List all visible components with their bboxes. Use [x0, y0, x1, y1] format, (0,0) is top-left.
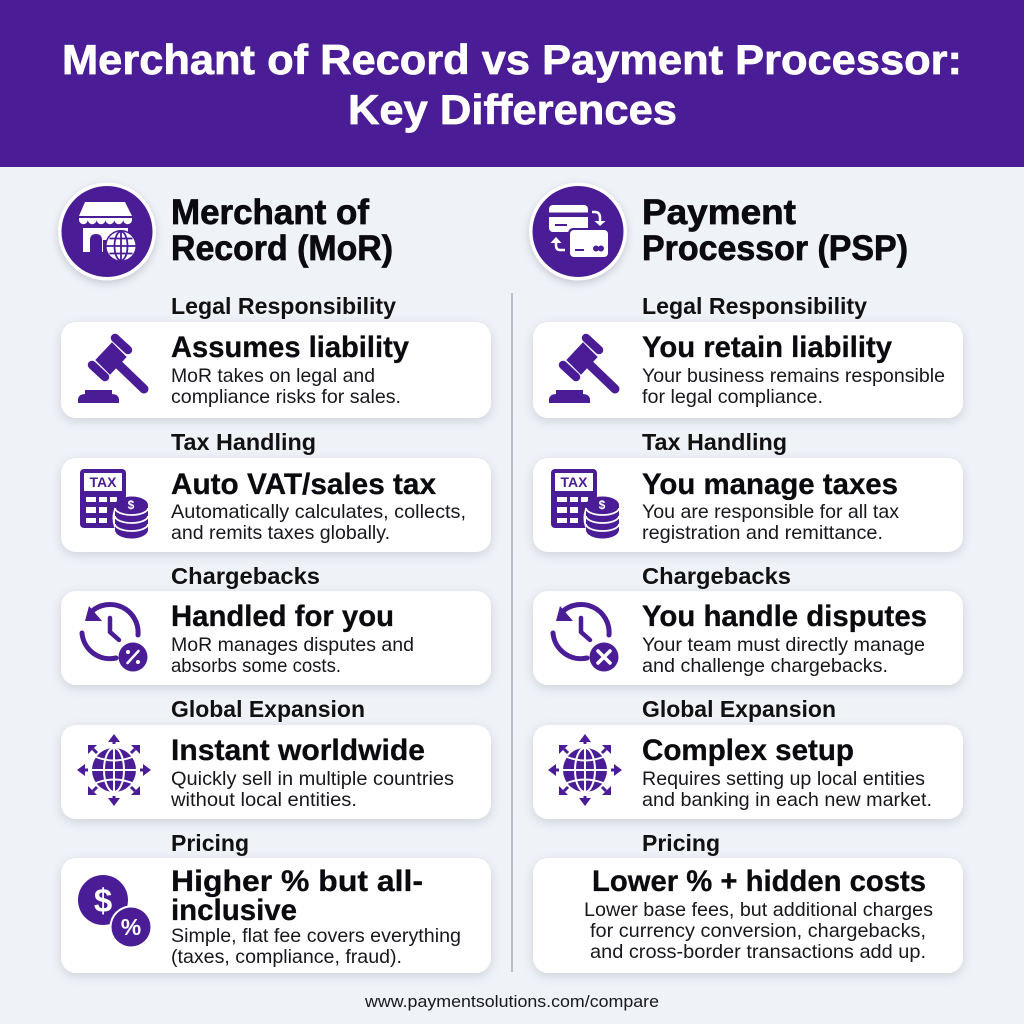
- description: (taxes, compliance, fraud).: [171, 946, 402, 968]
- description: Quickly sell in multiple countries: [171, 768, 454, 790]
- icon: dollar and percent coins: [78, 875, 152, 948]
- card: PSP pricing: [533, 858, 963, 973]
- footer url: www.paymentsolutions.com/compare: [364, 992, 659, 1011]
- column header: Merchant of Record: [58, 182, 393, 280]
- icon: tax calculator and coins: [551, 469, 620, 540]
- heading: You retain liability: [642, 331, 892, 364]
- row label: Global Expansion (PSP): Global Expansion: [642, 696, 836, 722]
- card: MoR legal: [61, 322, 491, 418]
- card: MoR global: [61, 725, 491, 819]
- title: [62, 36, 962, 133]
- heading: Lower % + hidden costs: [592, 865, 926, 898]
- description: and banking in each new market.: [642, 789, 932, 811]
- row label: Pricing (PSP): Pricing: [642, 830, 720, 856]
- heading: Complex setup: [642, 734, 854, 767]
- card: MoR chargebacks: [61, 591, 491, 685]
- row label: Legal Responsibility (MoR): Legal Responsibility: [171, 293, 396, 319]
- description: Your business remains responsible: [642, 365, 945, 387]
- description: compliance risks for sales.: [171, 386, 401, 408]
- description: without local entities.: [170, 789, 357, 811]
- description: [584, 899, 933, 963]
- description: [642, 768, 932, 811]
- column title: Record (MoR): [171, 229, 393, 268]
- heading: Higher % but all-: [171, 865, 423, 898]
- description: [171, 634, 414, 677]
- heading: Handled for you: [171, 600, 394, 633]
- column title: [171, 193, 393, 268]
- icon: globe with arrows: [77, 734, 151, 806]
- heading: You handle disputes: [642, 600, 927, 633]
- row label: Chargebacks (MoR): Chargebacks: [171, 563, 320, 589]
- column title: Processor (PSP): [642, 229, 908, 268]
- description: absorbs some costs.: [171, 655, 341, 677]
- description: [642, 634, 925, 677]
- heading: [171, 865, 423, 927]
- icon: dollar and percent coins: %: [121, 914, 141, 940]
- description: Lower base fees, but additional charges: [584, 899, 933, 921]
- icon: dollar and percent coins: $: [94, 882, 112, 919]
- row label: Tax Handling (PSP): Tax Handling: [642, 429, 787, 455]
- row label: Pricing (MoR): Pricing: [171, 830, 249, 856]
- description: for legal compliance.: [642, 386, 823, 408]
- description: and challenge chargebacks.: [642, 655, 888, 677]
- card: PSP legal: [533, 322, 963, 418]
- description: and cross-border transactions add up.: [590, 941, 926, 963]
- description: registration and remittance.: [642, 522, 883, 544]
- column title: Payment: [642, 193, 796, 232]
- icon: gavel: [549, 338, 615, 403]
- description: and remits taxes globally.: [171, 522, 390, 544]
- description: You are responsible for all tax: [642, 501, 899, 523]
- card: MoR tax: [61, 458, 491, 552]
- card: MoR pricing: [61, 858, 491, 973]
- description: MoR manages disputes and: [171, 634, 414, 656]
- description: Your team must directly manage: [642, 634, 925, 656]
- header banner: [0, 0, 1024, 167]
- icon: tax calculator and coins: $: [599, 498, 606, 512]
- title: Merchant of Record vs Payment Processor:: [62, 36, 962, 83]
- description: [642, 501, 899, 544]
- card: PSP tax: [533, 458, 963, 552]
- icon: globe with arrows: [548, 734, 622, 806]
- card: PSP global: [533, 725, 963, 819]
- description: Simple, flat fee covers everything: [171, 925, 461, 947]
- description: [170, 768, 454, 811]
- description: Requires setting up local entities: [642, 768, 925, 790]
- column header: Payment Processor: [529, 182, 908, 280]
- icon: clock with percent badge: [82, 604, 148, 672]
- description: Automatically calculates, collects,: [171, 501, 466, 523]
- icon: tax calculator and coins: [80, 469, 150, 540]
- icon: tax calculator and coins: TAX: [561, 474, 588, 490]
- icon: tax calculator and coins: $: [128, 498, 135, 512]
- card: PSP chargebacks: [533, 591, 963, 685]
- description: [171, 501, 466, 544]
- row label: Global Expansion (MoR): Global Expansion: [171, 696, 365, 722]
- heading: Auto VAT/sales tax: [171, 468, 436, 501]
- column title: [642, 193, 908, 268]
- icon: tax calculator and coins: TAX: [90, 474, 117, 490]
- icon: gavel: [78, 338, 144, 403]
- icon: storefront with globe: [58, 182, 156, 280]
- heading: inclusive: [171, 894, 297, 927]
- description: [171, 925, 461, 968]
- row label: Chargebacks (PSP): Chargebacks: [642, 563, 791, 589]
- icon: payment cards with arrows: [529, 182, 627, 280]
- icon: clock with x badge: [553, 604, 618, 672]
- title: Key Differences: [348, 86, 677, 133]
- heading: Assumes liability: [171, 331, 409, 364]
- description: for currency conversion, chargebacks,: [590, 920, 926, 942]
- heading: You manage taxes: [642, 468, 898, 501]
- row label: Legal Responsibility (PSP): Legal Responsibility: [642, 293, 867, 319]
- row label: Tax Handling (MoR): Tax Handling: [171, 429, 316, 455]
- description: [171, 365, 401, 408]
- description: MoR takes on legal and: [171, 365, 375, 387]
- column title: Merchant of: [171, 193, 369, 232]
- heading: Instant worldwide: [171, 734, 425, 767]
- description: [642, 365, 945, 408]
